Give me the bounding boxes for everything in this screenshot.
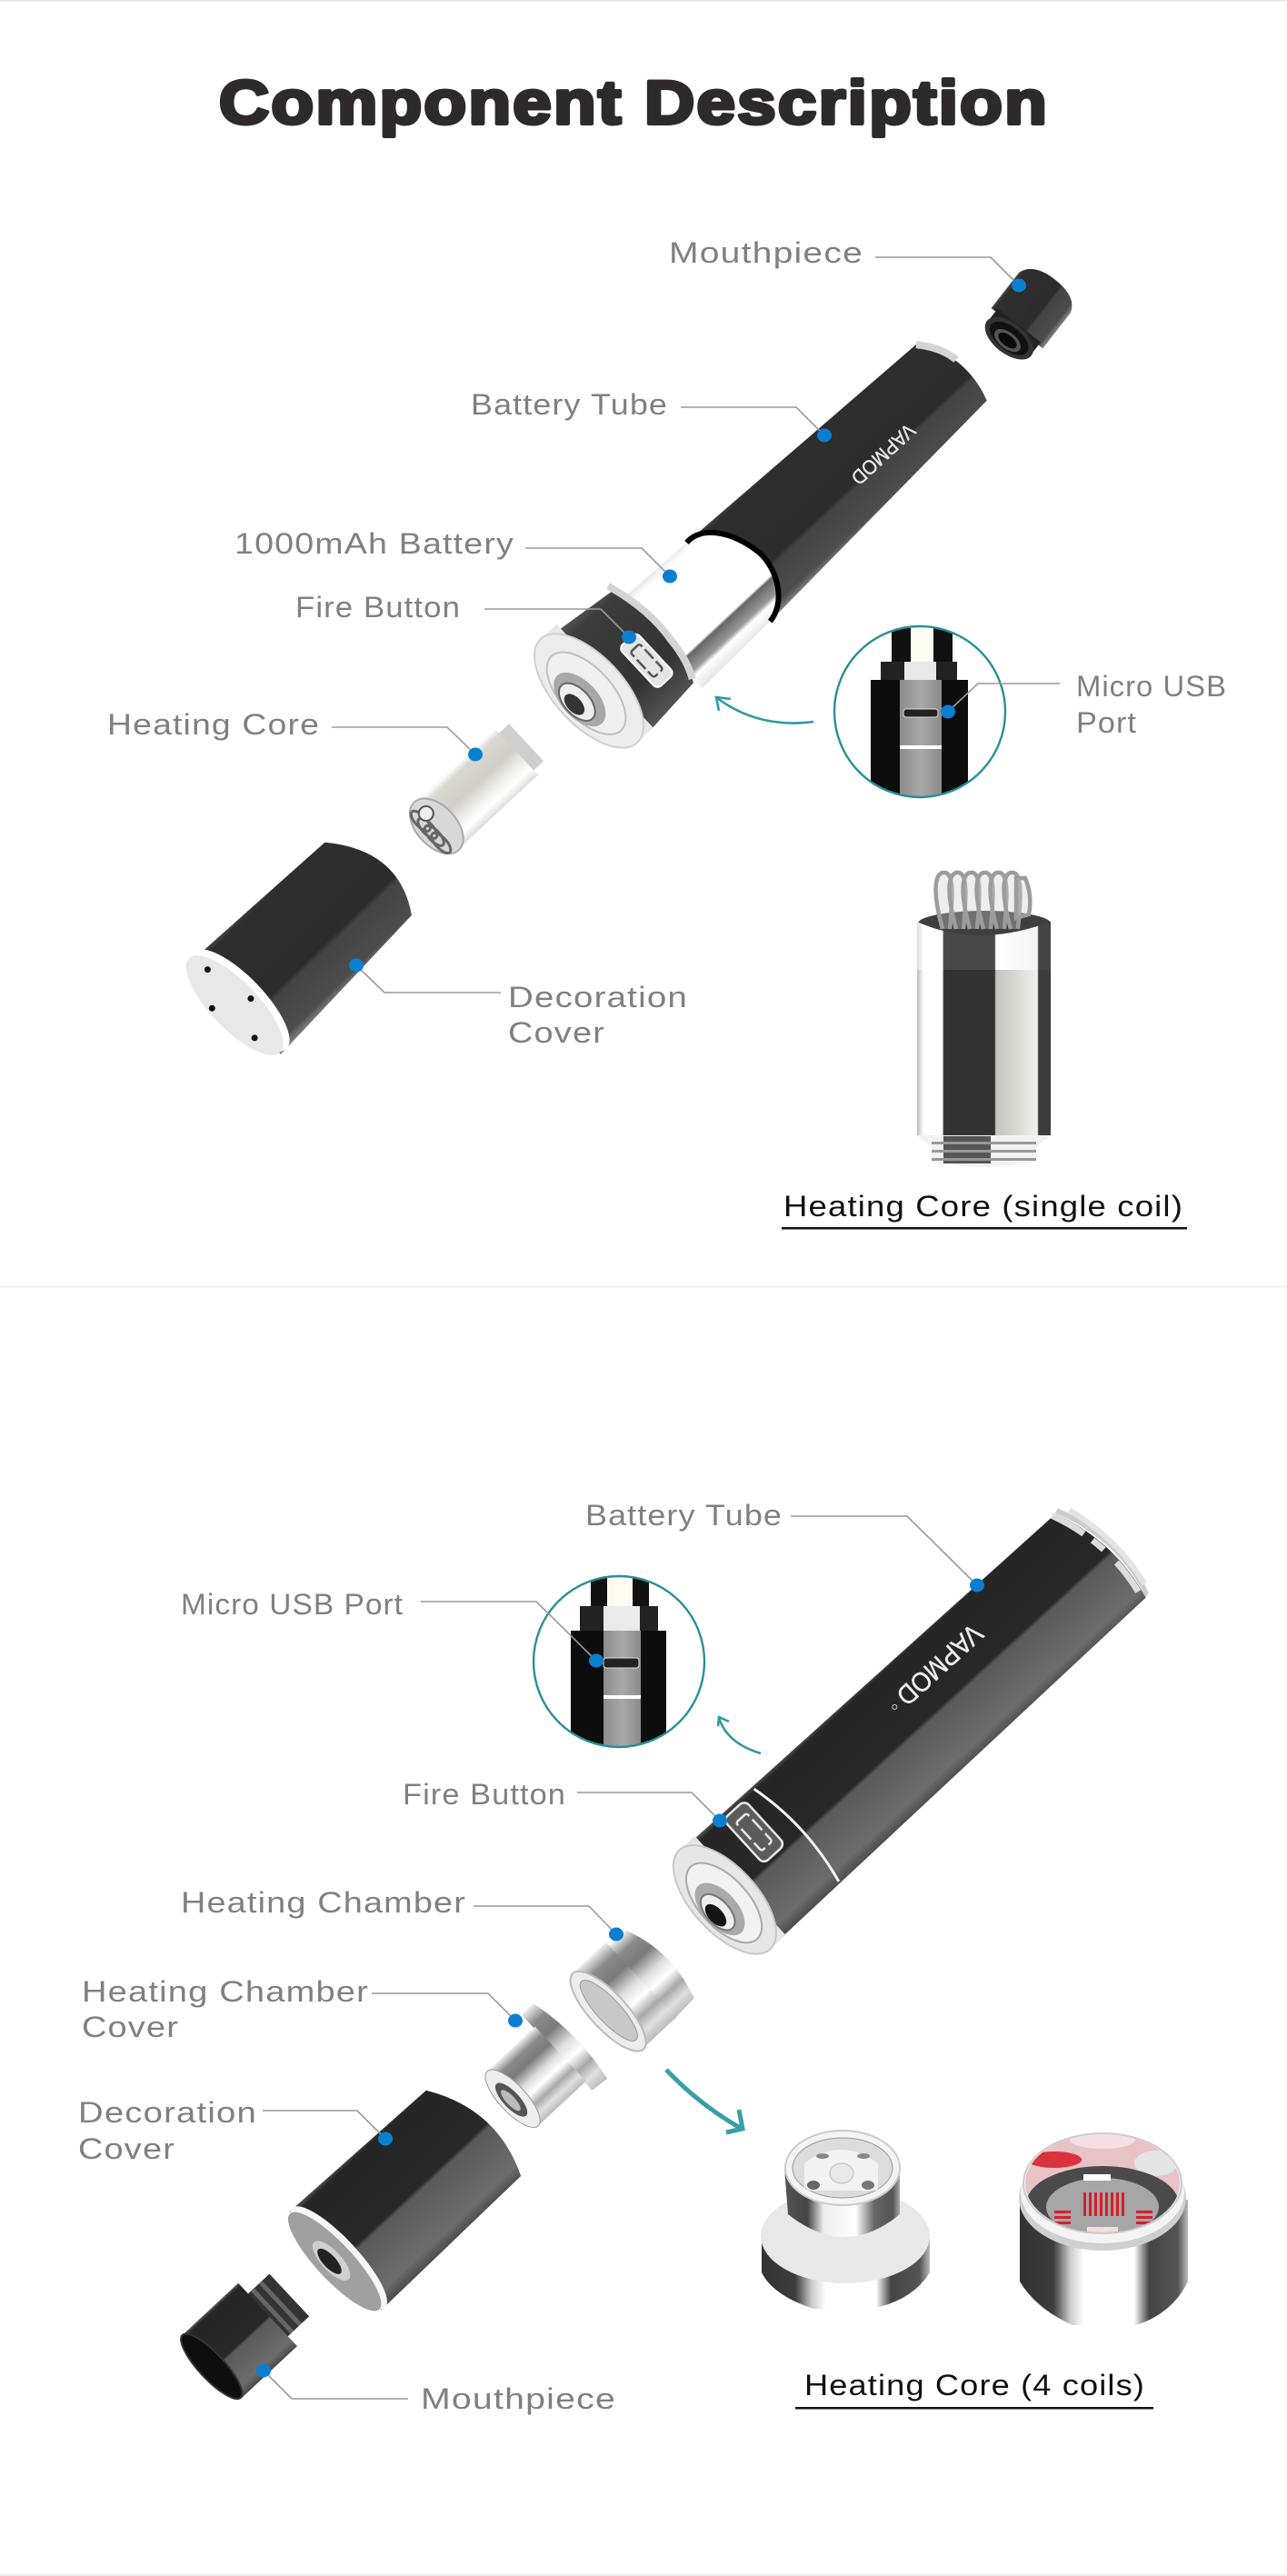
callout: Decoration Cover: Cover <box>508 1016 605 1049</box>
callout: Decoration Cover <box>349 958 688 1049</box>
callout: Heating Core <box>107 708 483 762</box>
component: battery tube (bottom) <box>655 1493 1159 1972</box>
callout: Battery Tube <box>585 1499 984 1593</box>
callout: Heating Chamber <box>181 1886 624 1942</box>
callout: Decoration Cover: Decoration <box>508 981 688 1013</box>
component: mouthpiece (bottom) <box>173 2263 318 2407</box>
callout: Mouthpiece <box>669 236 1026 293</box>
callout: Fire Button <box>403 1778 727 1827</box>
callout: Micro USB Port <box>941 670 1227 739</box>
caption: Heating Core (4 coils): Heating Core (4 coils) <box>804 2369 1145 2401</box>
detail: micro USB port magnifier <box>834 623 1005 802</box>
detail: micro USB port magnifier <box>534 1573 704 1752</box>
callout: Fire Button <box>295 591 636 644</box>
component: battery tube (top) <box>621 321 1003 688</box>
callout: Decoration Cover <box>78 2096 393 2165</box>
callout: Heating Chamber Cover: Heating Chamber <box>82 1975 369 2008</box>
callout: Heating Chamber: Heating Chamber <box>181 1886 466 1919</box>
callout: Decoration Cover: Cover <box>78 2132 175 2165</box>
callout: Micro USB Port: Micro USB <box>1076 670 1227 703</box>
callout: Fire Button: Fire Button <box>403 1778 566 1811</box>
fire button <box>723 1800 785 1864</box>
arrow: to port detail <box>716 697 813 724</box>
panel: single coil exploded view <box>107 236 1227 1229</box>
callout: Battery Tube <box>471 388 832 442</box>
callout: 1000mAh Battery: 1000mAh Battery <box>234 527 514 560</box>
callout: Micro USB Port: Micro USB Port <box>181 1588 404 1621</box>
callout: Mouthpiece <box>256 2363 616 2415</box>
component: decoration cover (bottom) <box>274 2071 533 2324</box>
callout: Mouthpiece: Mouthpiece <box>421 2382 616 2415</box>
title: Component Description <box>219 68 1049 137</box>
callout: Fire Button: Fire Button <box>295 591 461 624</box>
caption: Heating Core (single coil): Heating Core (single coil) <box>783 1190 1183 1223</box>
callout: Micro USB Port: Port <box>1076 706 1137 739</box>
callout: Heating Chamber Cover <box>82 1975 523 2043</box>
coil springs <box>408 808 454 856</box>
callout: 1000mAh Battery <box>234 527 677 584</box>
callout: Heating Core: Heating Core <box>107 708 320 741</box>
button <box>619 632 674 689</box>
tube logo: VAPMOD <box>847 419 920 490</box>
tube logo: VAPMOD <box>891 1618 988 1711</box>
callout: Battery Tube: Battery Tube <box>585 1499 783 1532</box>
arrow: to four coil core <box>666 2070 743 2132</box>
arrow: to port detail <box>718 1717 761 1753</box>
callout: Mouthpiece: Mouthpiece <box>669 236 863 269</box>
component: heating core (top) <box>400 718 549 864</box>
1000mAh battery cell <box>621 509 801 688</box>
component: four coil core, red coils <box>1019 2131 1188 2325</box>
callout: Heating Chamber Cover: Cover <box>82 2011 179 2043</box>
component: four coil core, open flange <box>761 2131 930 2309</box>
component: decoration cover (top) <box>171 814 430 1070</box>
panel: four coil exploded view <box>78 1493 1188 2415</box>
component: heating chamber cover <box>465 1999 611 2144</box>
component: heating chamber <box>560 1920 702 2062</box>
component: mouthpiece (top) <box>973 259 1081 371</box>
callout: Battery Tube: Battery Tube <box>471 388 668 421</box>
component: single coil heating core <box>917 873 1051 1167</box>
component: fire button cap <box>515 574 707 766</box>
callout: Decoration Cover: Decoration <box>78 2096 257 2129</box>
callout: Micro USB Port <box>181 1588 604 1667</box>
white ring <box>754 1784 844 1882</box>
end cap <box>655 1828 794 1972</box>
